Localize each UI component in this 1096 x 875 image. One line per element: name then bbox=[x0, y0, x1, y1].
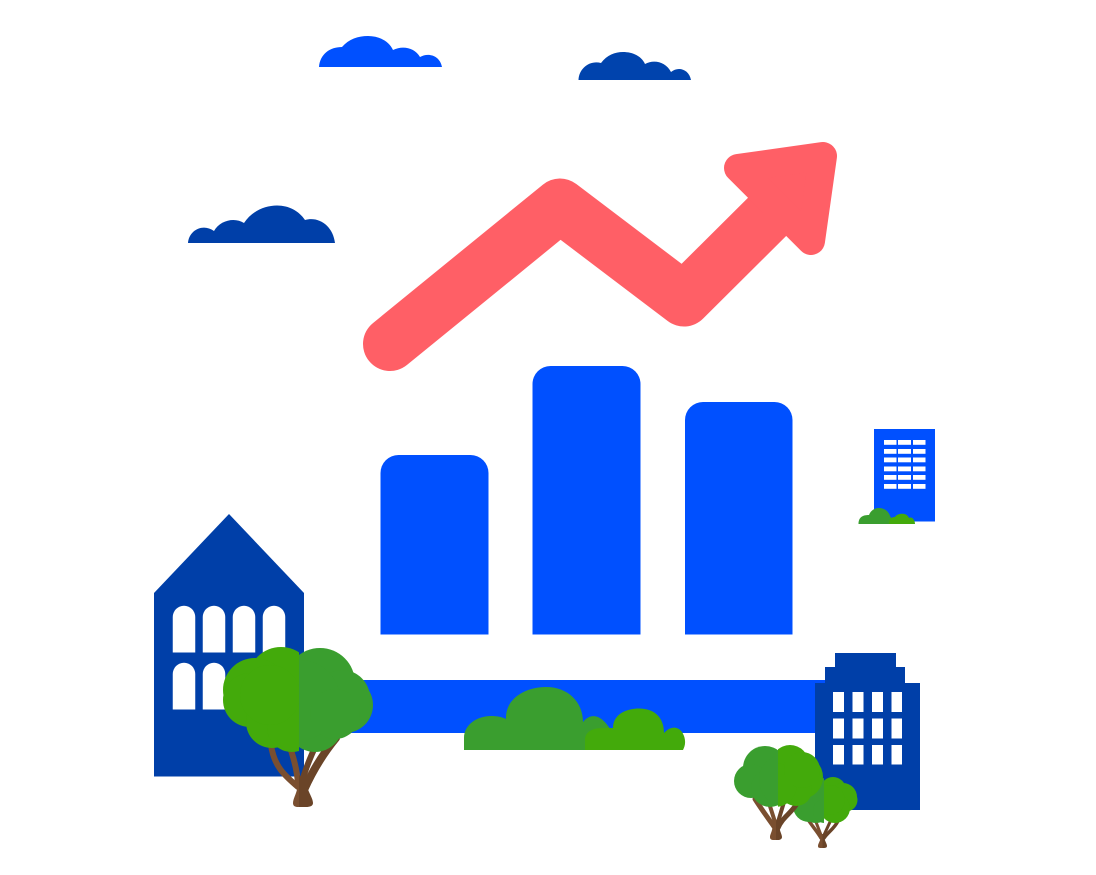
cloud: left bbox=[188, 206, 335, 243]
ground band bbox=[340, 680, 830, 733]
illustration: city growth scene bbox=[154, 36, 935, 848]
cloud: top right bbox=[578, 52, 691, 80]
bar 3 bbox=[685, 402, 792, 634]
bush: centre bbox=[464, 687, 685, 750]
arrow: rising trend bbox=[390, 156, 823, 344]
building: small office bbox=[874, 429, 935, 522]
tree: medium right bbox=[734, 745, 823, 840]
tree: large bbox=[223, 647, 373, 807]
cloud: top centre bbox=[319, 36, 442, 67]
building: office tower bbox=[815, 653, 920, 810]
bar 2 bbox=[532, 366, 640, 634]
bush: beside small office bbox=[858, 508, 915, 524]
tree: small right bbox=[793, 777, 858, 848]
building: gabled house bbox=[154, 514, 304, 776]
bar chart bbox=[380, 366, 792, 634]
bar 1 bbox=[380, 455, 488, 634]
